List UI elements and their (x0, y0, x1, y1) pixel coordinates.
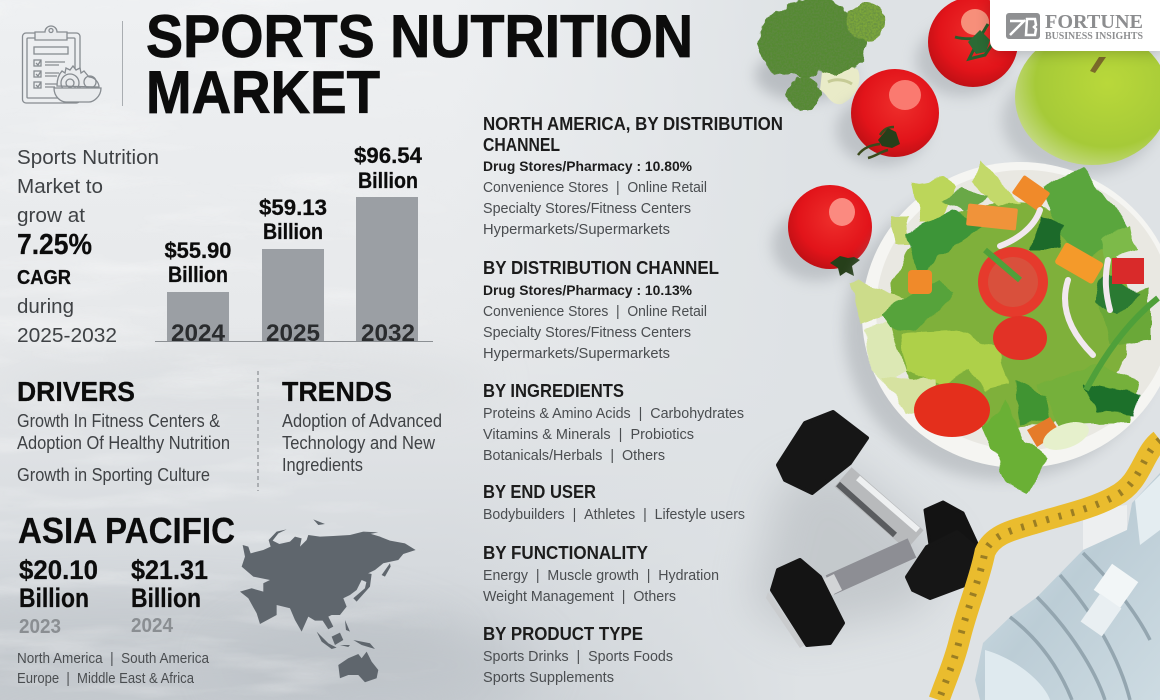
segment: by ingredients: BY INGREDIENTS (483, 381, 624, 401)
panel: trends: Ingredients (282, 455, 363, 475)
illustration: water bottle (975, 473, 1160, 700)
panel: Asia Pacific: ASIA PACIFIC (18, 510, 235, 551)
panel: trends (282, 376, 442, 475)
illustration: salad bowl (844, 160, 1160, 493)
panel: Asia Pacific (17, 510, 235, 687)
stat 2024: $21.31 (131, 555, 208, 585)
segment: by distribution channel: Convenience Stores | Online Retail (483, 303, 707, 320)
segment: North America by distribution channel: NORTH AMERICA, BY DISTRIBUTION (483, 114, 783, 134)
text block: market growth: during (17, 296, 74, 318)
panel: drivers (17, 376, 230, 485)
segment: by ingredients: Botanicals/Herbals | Others (483, 447, 665, 464)
panel: trends: Adoption of Advanced (282, 411, 442, 431)
text block: market growth: CAGR (17, 267, 72, 289)
bar 2025: $59.13 (259, 195, 327, 220)
text block: market growth: Sports Nutrition (17, 147, 159, 169)
map: Asia Pacific (240, 519, 416, 682)
segment: by end user: BY END USER (483, 482, 596, 502)
bar 2024: $55.90 (164, 238, 232, 263)
segment: North America by distribution channel: Specialty Stores/Fitness Centers (483, 200, 691, 217)
panel: trends: TRENDS (282, 376, 392, 407)
logo card: Fortune Business Insights: FORTUNE (1045, 11, 1143, 33)
segment: by distribution channel (483, 258, 719, 362)
segment: by functionality: BY FUNCTIONALITY (483, 543, 648, 563)
segment: by end user: Bodybuilders | Athletes | Lifestyle users (483, 506, 745, 523)
segment: North America by distribution channel: Drug Stores/Pharmacy : 10.80% (483, 158, 693, 174)
illustration: broccoli (755, 0, 885, 111)
segment: by ingredients (483, 381, 744, 464)
salad vegetables (908, 175, 1158, 455)
segment: by distribution channel: Drug Stores/Pharmacy : 10.13% (483, 282, 693, 298)
bar 2032: Billion (358, 168, 418, 193)
illustration: tomatoes (772, 0, 1018, 281)
segment: by distribution channel: Hypermarkets/Supermarkets (483, 345, 670, 362)
stat 2023: $20.10 (19, 555, 98, 585)
title (146, 3, 693, 126)
salad leaves (850, 160, 1150, 493)
stat 2024: Billion (131, 583, 201, 613)
text block: market growth: grow at (17, 205, 85, 227)
bar 2024: 2024 (171, 320, 226, 347)
other regions: Europe | Middle East & Africa (17, 670, 195, 687)
background (0, 0, 804, 700)
bar 2032 (354, 143, 423, 347)
stat 2023: Billion (19, 583, 89, 613)
title: MARKET (146, 59, 380, 126)
logo card: Fortune Business Insights: BUSINESS INSIGHTS (1045, 31, 1143, 42)
other regions (17, 650, 210, 687)
segment: by end user (483, 482, 745, 523)
panel: segmentation list (483, 114, 783, 686)
title: SPORTS NUTRITION (146, 3, 693, 70)
other regions: North America | South America (17, 650, 210, 667)
bar 2024: Billion (168, 262, 228, 287)
segment: by distribution channel: Specialty Stores/Fitness Centers (483, 324, 691, 341)
panel: drivers: DRIVERS (17, 376, 135, 407)
icon divider (122, 21, 124, 106)
text block: market growth: 2025-2032 (17, 325, 117, 347)
segment: North America by distribution channel: Convenience Stores | Online Retail (483, 179, 707, 196)
segment: by ingredients: Vitamins & Minerals | Probiotics (483, 426, 694, 443)
segment: by distribution channel: BY DISTRIBUTION CHANNEL (483, 258, 719, 278)
panel: drivers: Growth in Sporting Culture (17, 465, 210, 485)
segment: by functionality: Weight Management | Others (483, 588, 676, 605)
text block: market growth: Market to (17, 176, 103, 198)
illustration: green apple (1002, 29, 1160, 176)
segment: by product type: Sports Supplements (483, 669, 614, 686)
text block: market growth (17, 147, 159, 347)
segment: North America by distribution channel (483, 114, 783, 238)
segment: by product type (483, 624, 673, 686)
stat 2023 (19, 555, 98, 638)
segment: by functionality: Energy | Muscle growth | Hydration (483, 567, 719, 584)
stat 2024: 2024 (131, 615, 174, 637)
segment: by ingredients: Proteins & Amino Acids | Carbohydrates (483, 405, 744, 422)
bar 2025 (259, 195, 327, 347)
tomato middle (836, 69, 939, 166)
icon: clipboard with salad bowl (22, 26, 101, 103)
logo mark (1006, 13, 1040, 39)
tomato left (772, 185, 872, 281)
text block: market growth: 7.25% (17, 229, 92, 261)
bar 2024 (164, 238, 232, 347)
panel: trends: Technology and New (282, 433, 436, 453)
dumbbell two (766, 532, 982, 648)
bar chart: market size (155, 143, 433, 347)
stat 2024 (131, 555, 208, 637)
panel: drivers: Growth In Fitness Centers & (17, 411, 220, 431)
bar 2025: 2025 (266, 320, 320, 347)
logo card: Fortune Business Insights (990, 0, 1160, 53)
segment: by product type: Sports Drinks | Sports Foods (483, 648, 673, 665)
illustration: dumbbells (750, 412, 982, 648)
illustration: measuring tape (939, 440, 1160, 700)
panel: drivers: Adoption Of Healthy Nutrition (17, 433, 230, 453)
segment: by product type: BY PRODUCT TYPE (483, 624, 643, 644)
stat 2023: 2023 (19, 616, 61, 638)
dumbbell one (778, 412, 980, 570)
tomato top (916, 0, 1018, 96)
segment: North America by distribution channel: CHANNEL (483, 135, 560, 155)
bar 2025: Billion (263, 219, 323, 244)
bar 2032: 2032 (361, 320, 415, 347)
bar 2032: $96.54 (354, 143, 423, 168)
segment: North America by distribution channel: Hypermarkets/Supermarkets (483, 221, 670, 238)
segment: by functionality (483, 543, 719, 605)
